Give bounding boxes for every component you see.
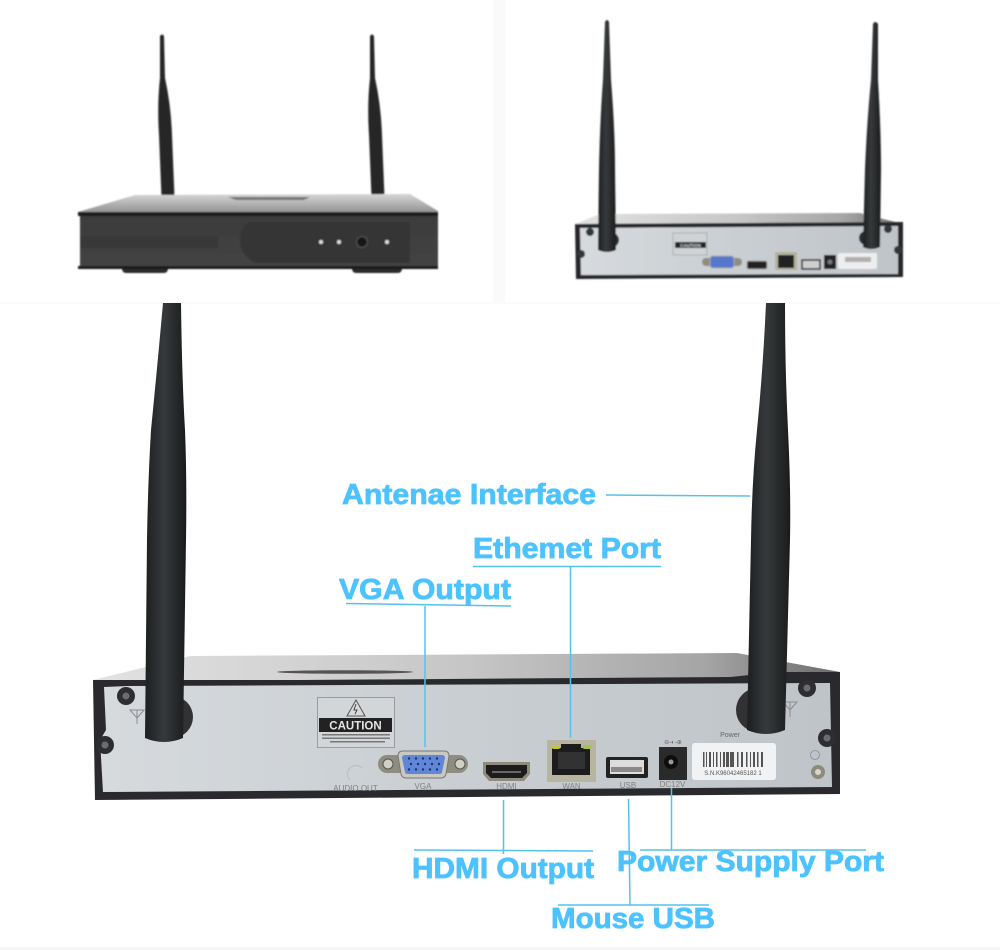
- top vent shadow: [277, 670, 413, 674]
- WAN port: [775, 252, 797, 270]
- port label: USB: USB: [620, 781, 636, 790]
- caution label: [673, 233, 707, 255]
- callout: mouse USB: [551, 799, 715, 935]
- callout: power supply port: [617, 788, 885, 878]
- callout: ethernet port: Ethemet Port: [473, 533, 662, 565]
- antenna: front right: [368, 34, 385, 210]
- antenna symbols: [130, 702, 797, 724]
- HDMI port: [747, 261, 767, 269]
- antenna: large left: [145, 303, 186, 742]
- VGA port: [378, 751, 468, 778]
- callout: VGA output: [339, 574, 512, 747]
- front control plate: [240, 222, 410, 263]
- VGA port: [702, 256, 742, 268]
- foot right: [352, 264, 402, 273]
- power label: Power: [720, 732, 741, 739]
- audio socket outline: [348, 766, 362, 780]
- barcode sticker: [838, 253, 877, 269]
- antenna: rear left: [598, 20, 616, 252]
- panel: rear view of recorder: [575, 20, 903, 279]
- callout: ethernet port: [473, 533, 662, 738]
- recorder top face: [575, 213, 903, 224]
- polarity symbol: ⊖-◐-⊕: [664, 740, 682, 746]
- barcode sticker: S.N.K96042465182 1: [704, 771, 762, 777]
- antenna: rear right: [863, 22, 881, 249]
- callout: antenna interface: Antenae Interface: [342, 479, 596, 511]
- USB port: [802, 260, 820, 269]
- barcode sticker: [692, 743, 776, 780]
- callout: mouse USB: Mouse USB: [551, 903, 715, 935]
- panel: enlarged rear view: [93, 303, 840, 800]
- DC power socket: [659, 747, 687, 780]
- callout: HDMI output: [412, 800, 595, 885]
- rear plate: [580, 226, 898, 275]
- caution label: CAUTION: [680, 243, 701, 248]
- LED indicators: [319, 240, 389, 244]
- antenna mount right: [736, 688, 780, 732]
- outer frame: [93, 672, 840, 800]
- port label: DC12V: DC12V: [660, 780, 686, 789]
- antenna: large right: [747, 303, 790, 734]
- panel: front view of recorder: [78, 34, 438, 273]
- WAN port: [547, 740, 596, 782]
- port label: HDMI: HDMI: [496, 782, 517, 791]
- recorder front face: [80, 212, 438, 269]
- front groove: [80, 236, 218, 248]
- antenna mount: [605, 233, 619, 247]
- rear plate: [100, 683, 832, 792]
- USB port: [606, 757, 648, 778]
- callout: VGA output: VGA Output: [339, 574, 512, 606]
- caution label: CAUTION: [329, 720, 382, 732]
- port label: VGA: VGA: [415, 782, 432, 791]
- IR button: [356, 236, 368, 248]
- screws: [96, 679, 836, 754]
- rear frame: [575, 222, 903, 279]
- DC socket: [824, 255, 836, 269]
- ground symbol: [810, 750, 825, 779]
- port label: audio out: AUDIO OUT: [333, 784, 378, 793]
- recorder top face: [78, 194, 438, 216]
- antenna: front left: [158, 34, 175, 210]
- antenna mount left: [151, 696, 193, 738]
- caution label: [318, 698, 394, 748]
- foot left: [122, 264, 168, 273]
- callout: power supply port: Power Supply Port: [617, 846, 885, 878]
- HDMI port: [483, 762, 530, 781]
- screws: [577, 225, 902, 258]
- vent on top face: [228, 197, 310, 200]
- port label: WAN: WAN: [562, 782, 581, 791]
- top face: [93, 653, 840, 688]
- callout: HDMI output: HDMI Output: [412, 853, 595, 885]
